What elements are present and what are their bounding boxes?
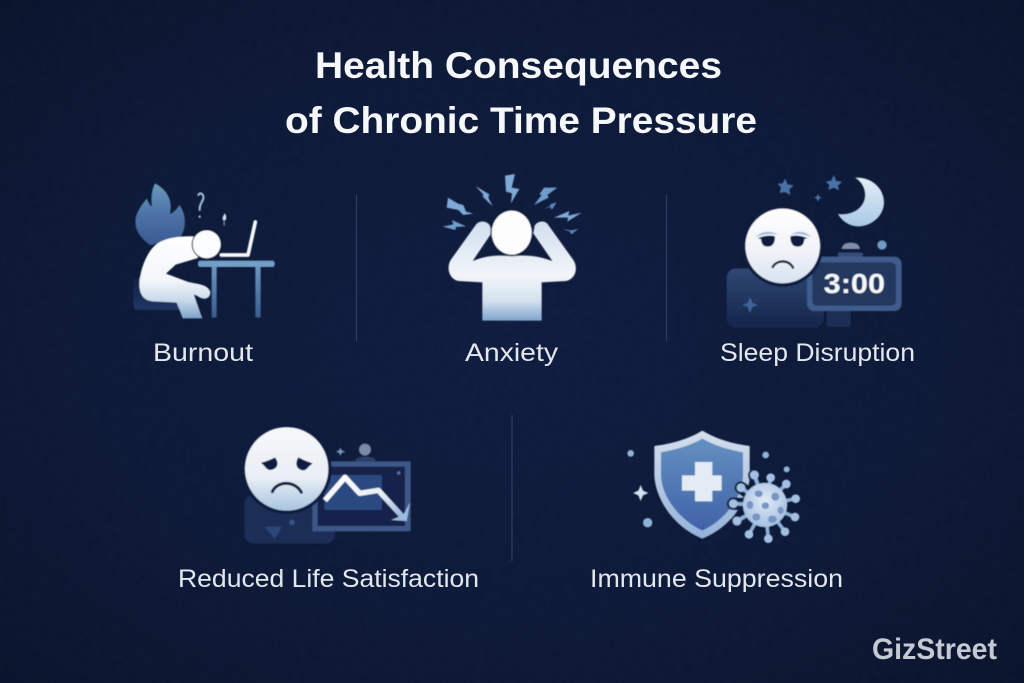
icon: frown: [773, 261, 793, 268]
icon: decorative dots: [627, 450, 790, 527]
icon: person dot: [359, 444, 371, 456]
icon: laptop: [221, 222, 255, 255]
icon: lightning bolts: [443, 174, 582, 234]
icon: sparkle plus: [336, 448, 345, 456]
panel: immune suppression: [590, 431, 843, 593]
title: [285, 44, 757, 141]
icon: virus spike tips: [729, 471, 800, 543]
icon: face: [742, 205, 823, 287]
icon: eyes: [261, 457, 277, 470]
clock time: 3:00: [824, 268, 885, 299]
icon: tired face with alarm clock: [727, 175, 902, 328]
icon: eye shadows: [756, 232, 778, 237]
icon: virus spots: [747, 490, 784, 523]
divider: top right: [666, 195, 668, 341]
icon: face: [242, 424, 332, 514]
divider: bottom: [511, 415, 513, 561]
icon: stars: [777, 175, 842, 202]
icon: virus halo: [733, 475, 782, 522]
panel: anxiety: [443, 174, 582, 367]
label: immune suppression: Immune Suppression: [590, 565, 843, 593]
label: anxiety: Anxiety: [465, 339, 559, 367]
icon: burnout figure at desk: [133, 183, 275, 318]
icon: moon: [838, 178, 884, 226]
icon: frown: [272, 483, 301, 492]
panel: sleep disruption: [720, 175, 915, 367]
title: of Chronic Time Pressure: [285, 99, 757, 141]
label: sleep disruption: Sleep Disruption: [720, 339, 915, 367]
icon: badge: [264, 527, 282, 539]
label: reduced life satisfaction: Reduced Life Satisfaction: [178, 565, 479, 593]
icon: shield and virus: [627, 431, 800, 543]
icon: clock button: [842, 243, 860, 249]
title: Health Consequences: [315, 44, 722, 86]
icon: sad face with declining chart: [242, 424, 411, 543]
icon: desk: [198, 261, 275, 267]
icon: sweat drop: [223, 213, 226, 221]
icon: body: [244, 495, 335, 543]
icon: flame: [135, 183, 185, 245]
panel: reduced life satisfaction: [178, 424, 479, 593]
icon: chart frame: [312, 461, 411, 531]
icon: sparkle: [633, 485, 648, 501]
icon: medical cross: [682, 462, 722, 501]
icon: alarm clock: [807, 257, 902, 311]
icon: virus body: [743, 483, 787, 527]
watermark: GizStreet: GizStreet: [872, 633, 997, 666]
label: burnout: Burnout: [153, 339, 253, 367]
icon: sparkle: [742, 297, 758, 313]
icon: slumped body: [139, 236, 210, 318]
icon: small dot: [877, 240, 887, 250]
icon: head: [490, 209, 533, 256]
icon: body: [727, 268, 824, 328]
icon: torso and arms: [449, 221, 576, 321]
icon: question mark: [198, 193, 203, 210]
icon: head: [192, 229, 222, 259]
icon: shield: [654, 431, 750, 539]
icon: seat: [133, 277, 179, 310]
divider: top left: [356, 195, 358, 341]
icon: person holding head: [443, 174, 582, 321]
icon: declining arrow: [325, 477, 403, 518]
panel: burnout: [133, 183, 275, 367]
icon: chart area: [324, 475, 382, 510]
icon: virus spikes: [733, 475, 796, 539]
icon: eyes: [758, 236, 775, 247]
